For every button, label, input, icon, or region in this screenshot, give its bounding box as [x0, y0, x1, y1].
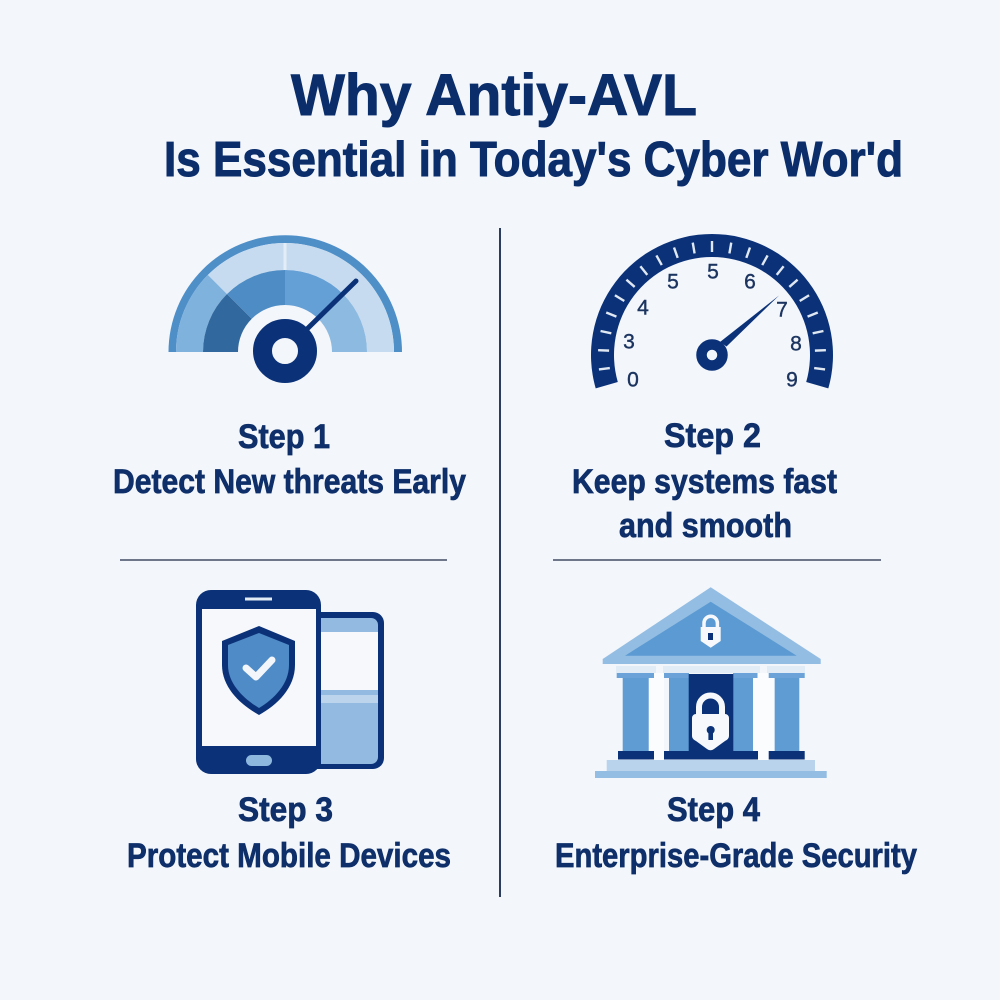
icon: numbered speedometer: 9: [786, 368, 798, 392]
icon: numbered speedometer: [591, 234, 833, 392]
icon: numbered speedometer: 6: [744, 270, 756, 294]
icon: numbered speedometer: 5: [667, 270, 679, 294]
step 1 description: Detect New threats Early: [113, 463, 466, 501]
title: Why Antiy-AVL: [291, 63, 697, 128]
icon: bank with locks: [595, 587, 827, 778]
step 3 label: Step 3: [238, 791, 333, 829]
step 4 label: Step 4: [667, 791, 760, 829]
icon: numbered speedometer: 7: [776, 298, 788, 322]
icon: shield with check: [222, 626, 295, 715]
icon: numbered speedometer: 5: [707, 260, 719, 284]
panel: step 2: [572, 234, 837, 545]
icon: phones with shield: [196, 590, 384, 774]
icon: small lock: [701, 616, 721, 648]
panel: step 1: [113, 235, 466, 501]
icon: large lock: [692, 696, 729, 750]
step 2 description: [572, 463, 837, 545]
panel: step 4: [555, 587, 917, 875]
step 3 description: Protect Mobile Devices: [127, 837, 451, 875]
icon: segmented gauge: [168, 235, 402, 374]
icon: numbered speedometer: 3: [623, 330, 635, 354]
step 2 label: Step 2: [664, 417, 761, 455]
step 2 description: Keep systems fast: [572, 463, 837, 501]
icon: numbered speedometer: 0: [627, 368, 639, 392]
title: Is Essential in Today's Cyber Wor'd: [164, 133, 903, 187]
step 4 description: Enterprise-Grade Security: [555, 837, 917, 875]
icon: numbered speedometer: 8: [790, 332, 802, 356]
step 2 description: and smooth: [619, 507, 792, 545]
icon: numbered speedometer: 4: [637, 296, 649, 320]
title: [164, 63, 903, 187]
panel: step 3: [127, 590, 451, 875]
step 1 label: Step 1: [238, 418, 330, 456]
